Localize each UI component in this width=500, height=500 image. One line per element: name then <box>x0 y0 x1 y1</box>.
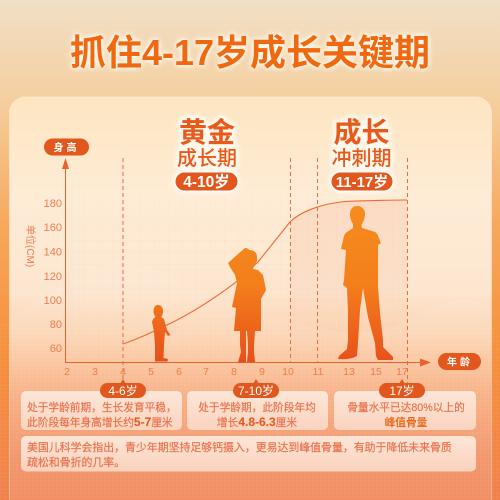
x axis labels: 15 <box>370 366 382 378</box>
y axis labels: 160 <box>44 222 62 234</box>
x axis labels: 6 <box>176 366 182 378</box>
card: ages 4-6: 处于学龄前期，生长发育平稳， <box>27 401 177 414</box>
card: ages 4-6: 此阶段每年身高增长约5-7厘米 <box>27 415 173 429</box>
callout: pediatric note: 疏松和骨折的几率。 <box>27 455 125 469</box>
card: age 17 <box>334 379 476 430</box>
x axis labels: 13 <box>343 366 355 378</box>
y axis with arrow <box>62 158 69 362</box>
y axis labels: 140 <box>44 246 62 258</box>
heading: sprint period: 成长 <box>333 117 390 148</box>
heading: golden period: 4-10岁 <box>183 173 230 191</box>
chart grid <box>66 195 408 362</box>
x axis labels: 10 <box>282 366 294 378</box>
x axis labels: 17 <box>396 366 408 378</box>
icon: teenager silhouette <box>338 206 393 360</box>
x axis labels <box>64 366 408 378</box>
height pill: 身高 <box>54 141 80 154</box>
card: ages 4-6: 4-6岁 <box>108 383 138 398</box>
callout: pediatric note <box>21 436 476 472</box>
card: age 17: 峰值骨量 <box>385 416 428 429</box>
x axis labels: 5 <box>148 366 154 378</box>
icon: middle child silhouette <box>228 248 266 362</box>
card: ages 7-10: 处于学龄期，此阶段年均 <box>198 401 316 414</box>
phase dashed lines <box>123 158 408 386</box>
x axis labels: 3 <box>92 366 98 378</box>
x axis labels: 4 <box>120 366 126 378</box>
card: ages 7-10: 增长4.8-6.3厘米 <box>217 415 297 429</box>
heading: golden period: 黄金 <box>179 117 235 148</box>
x axis labels: 8 <box>231 366 237 378</box>
height pill <box>44 138 89 156</box>
x axis labels: 2 <box>64 366 70 378</box>
y axis labels <box>44 198 62 355</box>
x axis labels: 9 <box>259 366 265 378</box>
x axis labels: 11 <box>313 366 324 378</box>
area under growth curve <box>290 200 407 362</box>
heading: sprint period: 11-17岁 <box>336 173 388 191</box>
heading: sprint period: 冲刺期 <box>332 147 392 170</box>
dotted wave decoration <box>0 260 500 500</box>
card: ages 4-6 <box>21 379 182 430</box>
heading: golden period: 成长期 <box>177 147 237 170</box>
y axis labels: 120 <box>44 271 62 283</box>
x axis with arrow <box>65 358 431 366</box>
main panel <box>10 97 492 500</box>
heading: sprint period <box>331 117 393 191</box>
card: ages 7-10 <box>187 379 328 430</box>
age pill <box>438 353 481 370</box>
chart <box>24 138 481 386</box>
growth curve <box>123 200 407 344</box>
heading: golden period <box>175 117 238 191</box>
title: 抓住4-17岁成长关键期 <box>70 32 430 73</box>
x axis labels: 7 <box>203 366 209 378</box>
age pill: 年龄 <box>447 356 473 368</box>
y axis labels: 80 <box>50 319 62 331</box>
y axis labels: 60 <box>50 343 62 355</box>
y axis unit: 单位(CM) <box>24 225 37 267</box>
card: ages 7-10: 7-10岁 <box>238 383 274 398</box>
card: age 17: 骨量水平已达80%以上的 <box>347 401 465 414</box>
y axis labels: 100 <box>44 295 62 307</box>
callout: pediatric note: 美国儿科学会指出，青少年期坚持足够钙摄入，更易达到峰值骨量，有助于降低未来骨质 <box>27 440 452 454</box>
icon: child silhouette <box>152 305 170 362</box>
card: age 17: 17岁 <box>389 383 415 398</box>
y axis labels: 180 <box>44 198 62 210</box>
